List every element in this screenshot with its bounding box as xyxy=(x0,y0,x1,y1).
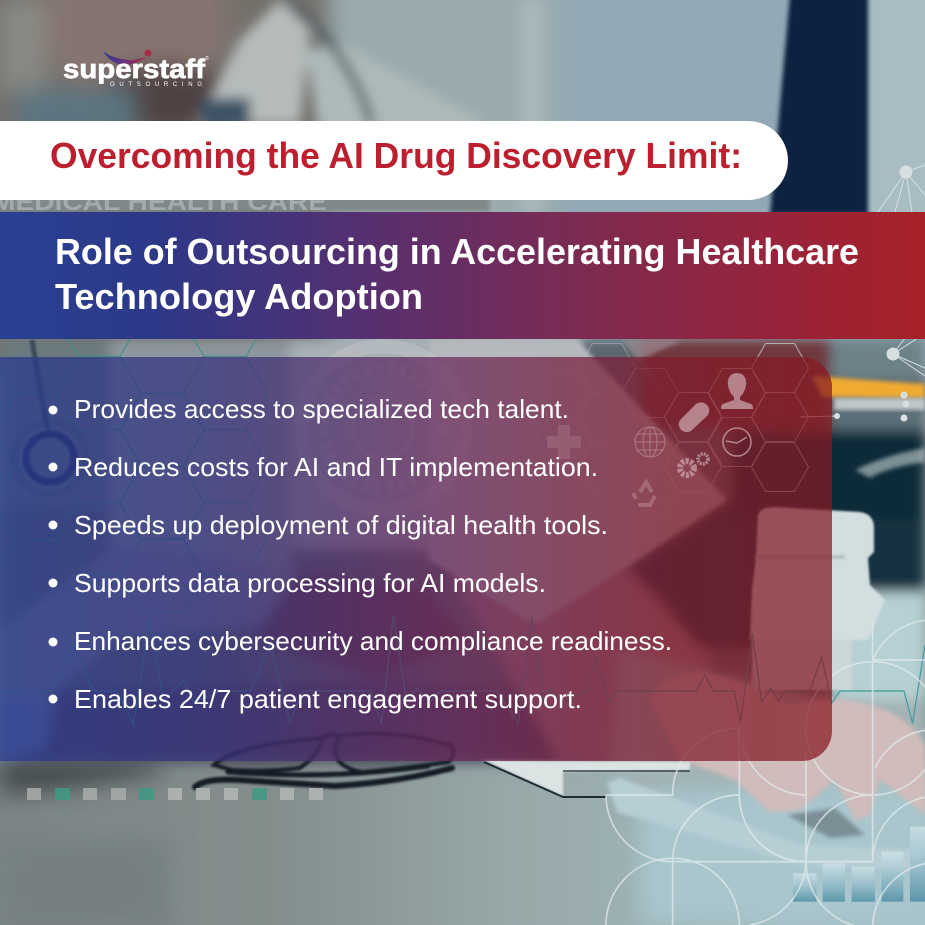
logo swoosh xyxy=(103,51,147,65)
bar chart overlay xyxy=(793,827,925,902)
bullet 4: Supports data processing for AI models. xyxy=(74,568,546,598)
bullet 2: Reduces costs for AI and IT implementation. xyxy=(74,452,598,482)
logo xyxy=(63,50,209,88)
title heading: Overcoming the AI Drug Discovery Limit: xyxy=(50,135,742,176)
subtitle heading: Role of Outsourcing in Accelerating Healthcare xyxy=(55,231,859,272)
medical icons over panel xyxy=(547,373,753,505)
circuit disc xyxy=(301,346,465,510)
hand over keyboard xyxy=(607,672,925,870)
icon: gears xyxy=(680,454,708,475)
logo: OUTSOURCING xyxy=(110,82,202,88)
subtitle band xyxy=(0,212,925,339)
geometric arc line art xyxy=(606,620,925,925)
strip behind caption xyxy=(0,196,490,212)
icon: cross xyxy=(547,425,581,459)
subtitle heading: Technology Adoption xyxy=(55,276,423,317)
bullet 6: Enables 24/7 patient engagement support. xyxy=(74,684,582,714)
icon: globe xyxy=(635,427,665,457)
teal hexagon mesh xyxy=(0,284,267,612)
orange folder stripe xyxy=(812,376,925,398)
logo: ® xyxy=(205,55,209,62)
icon: recycle xyxy=(633,482,655,505)
stethoscope xyxy=(14,340,86,494)
bullet 1: Provides access to specialized tech talent. xyxy=(74,394,569,424)
desk xyxy=(0,760,925,925)
eyeglasses xyxy=(195,734,453,787)
title pill xyxy=(0,121,788,200)
clipboard paper xyxy=(430,340,727,625)
hexagon icon cluster xyxy=(492,344,808,516)
ECG trace under panel xyxy=(0,615,925,724)
bullet 3: Speeds up deployment of digital health tools. xyxy=(74,510,608,540)
logo: superstaff xyxy=(63,54,206,84)
dark tie xyxy=(770,0,868,215)
strip and panel-zone photo xyxy=(0,339,925,780)
icon: capsule xyxy=(679,402,709,432)
book under panel xyxy=(483,760,690,796)
icon: person xyxy=(721,373,753,409)
bottle xyxy=(750,507,885,690)
panel: benefits list xyxy=(0,357,832,761)
icon: clock xyxy=(723,428,751,456)
floating square markers xyxy=(27,788,323,800)
network nodes xyxy=(800,165,925,422)
bullet 5: Enhances cybersecurity and compliance readiness. xyxy=(74,626,672,656)
faded photo caption: MEDICAL HEALTH CARE xyxy=(0,189,327,216)
